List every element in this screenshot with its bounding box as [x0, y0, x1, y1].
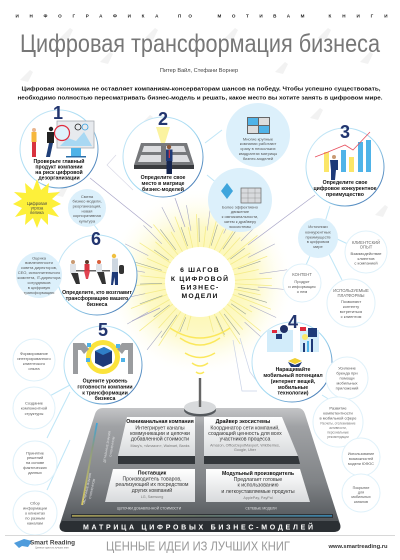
- bubble: collecting customer data: [13, 491, 57, 535]
- top label: МОТИВАМ: [218, 14, 305, 18]
- bubble: component structure: [13, 387, 55, 429]
- caption: [141, 175, 186, 193]
- icon: book: [14, 539, 32, 548]
- bubble: mobile channel coverage: Покрытие: [353, 486, 369, 490]
- signal arcs and pole: [170, 328, 230, 404]
- step 2: [123, 109, 203, 197]
- intro text: [18, 86, 383, 102]
- bubble: board engagement: комитета, IT-директора: [17, 275, 61, 280]
- starburst: digital threat: угроза: [31, 206, 44, 210]
- axis labels: СЕТЕВЫЕ МОДЕЛИ: [245, 506, 277, 510]
- caption: Наращивайте: [276, 366, 311, 373]
- number 1: 1: [53, 103, 63, 123]
- icon: team at table: [70, 254, 124, 285]
- card: modular producer: и легкоуставляемые продукты: [221, 489, 295, 495]
- caption: цифровое конкурентное: [313, 185, 377, 192]
- matrix title band: МАТРИЦА ЦИФРОВЫХ БИЗНЕС-МОДЕЛЕЙ: [83, 522, 313, 532]
- bubble: brand strengthening: бренда при: [336, 370, 358, 376]
- watermarks: [20, 28, 388, 217]
- card: ecosystem driver: Amazon, OfficeDepotMaxpert, Wildberries,: [210, 444, 280, 448]
- caption: к трансформации: [82, 390, 128, 396]
- bubble: movement to ecosystems: Более эффективно: [222, 204, 259, 210]
- bubble: board engagement: сотрудников: [28, 280, 50, 285]
- card: supplier: LG, Samsung: [141, 495, 163, 499]
- axis bar: [71, 514, 333, 518]
- connector lines: [46, 130, 350, 490]
- card: omnichannel company: Macy's, «Amazon», Walmart, Banks: [131, 444, 190, 448]
- bubble: brand strengthening: мобильных: [336, 380, 358, 386]
- footer rule: [5, 534, 395, 537]
- starburst: digital threat: Цифровая: [27, 201, 47, 206]
- card: supplier: Поставщик: [138, 470, 167, 476]
- platform body: [60, 408, 340, 532]
- card: modular producer: Модульный производитель: [222, 470, 294, 477]
- card: supplier: реализующий их посредством: [116, 481, 189, 488]
- bubble: platforms used: Позволяют: [341, 299, 361, 304]
- bubble: board engagement: [16, 252, 62, 298]
- bubble: brand strengthening: [326, 357, 368, 399]
- bubble: integrated customer experience: интегрированного: [17, 356, 51, 361]
- bubble: sources of advantage: в цифровом: [307, 239, 330, 244]
- bubble: mobile competence: Развитие: [329, 406, 347, 410]
- card: ecosystem driver: Координатор сети компаний,: [210, 424, 280, 432]
- step 3: [306, 122, 384, 206]
- caption: Определите свое: [323, 180, 368, 186]
- bubble: collecting customer data: Сбор: [30, 500, 41, 506]
- bubble: large companies: квадрантах матрицы: [239, 151, 277, 156]
- bubble: component structure: Создание: [25, 400, 44, 406]
- bubble: board engagement: трансформацию: [24, 290, 54, 295]
- number 6: 6: [91, 229, 101, 249]
- bubble: content: о нем: [297, 289, 308, 294]
- bubble: collecting customer data: по разным: [25, 516, 45, 520]
- bubble: platforms used: встретиться: [340, 309, 362, 314]
- bubble: fact-based decisions: решений: [27, 455, 43, 460]
- caption: (интернет вещей,: [271, 378, 316, 385]
- bubble: movement to ecosystems: экосистемы: [229, 224, 251, 229]
- bubble: movement to ecosystems: затем к драйверу: [224, 219, 256, 224]
- bubble: customer experience: Взаимодействие: [350, 251, 382, 256]
- number 2: 2: [158, 109, 168, 129]
- top label: [16, 14, 388, 18]
- bubble: collecting customer data: информации: [23, 506, 47, 510]
- bubble: platforms used: контенту: [343, 304, 359, 309]
- bubble: API use: Использование: [348, 452, 374, 456]
- bubble: large companies: сразу в нескольких: [240, 146, 276, 151]
- bubble: integrated customer experience: Формирование: [20, 351, 49, 356]
- saucer: [184, 400, 216, 416]
- platform: business model matrix: [60, 408, 340, 532]
- left edge scale and text: О КОНЕЧНОМ: [88, 478, 96, 499]
- center circle: 6 steps: БИЗНЕС-: [180, 284, 220, 292]
- caption: бизнеса: [87, 301, 107, 308]
- left edge scale and text: [82, 423, 116, 505]
- bubble: change of business model: новая: [82, 208, 92, 214]
- card: ecosystem driver: Google, Uber: [234, 448, 257, 452]
- bubble: change of business model: бизнес-модели,: [72, 198, 102, 204]
- bubble: board engagement: в цифровую: [28, 285, 50, 290]
- card: supplier: [105, 469, 195, 502]
- icon: monitor and people: [32, 121, 94, 158]
- axis labels: ЦЕПОЧКИ ДОБАВЛЕННОЙ СТОИМОСТИ: [117, 506, 182, 510]
- bubble: mobile channel coverage: для: [358, 490, 364, 494]
- caption: [313, 180, 377, 198]
- card: ecosystem driver: создающий ценность для всех: [208, 430, 282, 437]
- card: omnichannel company: Интегрирует каналы: [135, 426, 185, 432]
- card: supplier: Производитель товаров,: [122, 476, 182, 482]
- footer slogan: ЦЕННЫЕ ИДЕИ ИЗ ЛУЧШИХ КНИГ: [106, 540, 290, 554]
- card: omnichannel company: Омниканальная компания: [126, 419, 194, 425]
- caption: трансформацию вашего: [66, 295, 128, 302]
- icon: mobile and internet of things: [267, 325, 319, 367]
- caption: Оцените уровень: [83, 378, 127, 384]
- bubble: large companies: бизнес-моделей: [243, 156, 273, 161]
- caption: готовности компании: [77, 384, 133, 390]
- step 5: [64, 320, 142, 404]
- card: modular producer: [206, 469, 310, 502]
- bubble: change of business model: Смена: [81, 194, 94, 199]
- bubble: mobile competence: в мобильной сфере: [320, 416, 357, 420]
- bubble: component structure: компонентной: [21, 406, 47, 410]
- card: supplier: других компаний: [132, 487, 172, 494]
- step 1: [20, 103, 98, 188]
- icon: matrix plate and man: [134, 127, 194, 174]
- caption: Определите, кто возглавит: [62, 290, 132, 296]
- starburst: digital threat: [13, 179, 61, 228]
- card: omnichannel company: [118, 417, 195, 456]
- caption: бизнеса: [95, 395, 115, 402]
- bubble: platforms used: с клиентом: [341, 314, 362, 319]
- number 3: 3: [340, 122, 350, 142]
- caption: бизнес-моделей: [142, 186, 184, 193]
- caption: место в матрице: [142, 181, 185, 187]
- bubble: API use: [342, 438, 380, 476]
- bubble: board engagement: Оценка: [32, 256, 47, 260]
- top label: ПО: [178, 14, 192, 18]
- bubble: sources of advantage: мире: [313, 244, 323, 249]
- bubble: API use: модели ЮФОС: [348, 462, 374, 466]
- icon: bar chart with analyst: [315, 132, 371, 180]
- intro text: Цифровая экономика не оставляет компаниям-консерваторам шансов на победу. Чтобы успешно существовать,: [22, 86, 381, 92]
- bubble: customer experience: ОПЫТ: [360, 244, 373, 250]
- left edge scale and text: ЧАСТИЧНЫЕ ЗНАНИЯ: [82, 473, 92, 505]
- bubble: content: [283, 264, 321, 302]
- bubble: fact-based decisions: на основе: [26, 460, 45, 465]
- card: modular producer: ApplePay, PayPal: [243, 496, 273, 500]
- bubble: sources of advantage: Источники: [308, 224, 328, 229]
- bubble: mobile channel coverage: [342, 474, 380, 512]
- bubble: board engagement: вовлеченности: [25, 260, 53, 265]
- card: ecosystem driver: Драйвер экосистемы: [216, 418, 271, 425]
- caption: на риск цифровой: [35, 169, 83, 176]
- bubble: brand strengthening: приложений: [336, 386, 358, 390]
- bubble: customer experience: с компанией: [354, 260, 378, 266]
- bubble: customer experience: КЛИЕНТСКИЙ: [352, 240, 380, 245]
- caption: мобильные: [278, 384, 308, 391]
- caption: преимущество: [326, 192, 364, 198]
- bubble: mobile competence: рекомендации: [327, 435, 349, 439]
- bubble: brand strengthening: Усиление: [338, 366, 357, 370]
- left edge scale and text: О КОНЕЧНОМ: [108, 436, 116, 457]
- caption: [263, 366, 323, 396]
- bubble: mobile competence: [313, 397, 363, 447]
- bubble: large companies: Многие крупные: [243, 136, 274, 142]
- caption: мобильный потенциал: [263, 372, 323, 379]
- axis labels: [117, 506, 277, 510]
- bubble: content: КОНТЕНТ: [292, 272, 312, 277]
- footer logo: [14, 539, 75, 550]
- bubble: sources of advantage: [298, 218, 338, 258]
- bubble: collecting customer data: о клиентах: [25, 510, 45, 516]
- caption: [34, 158, 84, 182]
- starburst: digital threat: велика: [30, 210, 44, 215]
- center circle: 6 steps: [165, 247, 235, 317]
- caption: Проверьте главный: [34, 158, 84, 165]
- center circle: 6 steps: МОДЕЛИ: [181, 293, 219, 300]
- card backing: [118, 456, 300, 464]
- bubble: platforms used: [327, 279, 375, 327]
- bubble: mobile competence: персональные: [327, 430, 349, 434]
- bubble: movement to ecosystems: к омниканальности,: [222, 214, 258, 219]
- number 4: 4: [288, 312, 298, 332]
- bubble: fact-based decisions: данных: [28, 470, 42, 475]
- bubble: component structure: структуры: [25, 411, 43, 416]
- bubble: board engagement: совета директоров,: [21, 265, 57, 270]
- bubble: platforms used: ИСПОЛЬЗУЕМЫЕ: [333, 288, 369, 293]
- bubble: mobile channel coverage: мобильных: [351, 495, 371, 499]
- bubble: board engagement: CEO, исполнительного: [18, 270, 61, 275]
- card: omnichannel company: коммуникации и цепочки: [130, 431, 190, 437]
- card: ecosystem driver: участников процесса: [220, 436, 270, 442]
- intro text: необходимо полностью пересматривать бизнес-модель и решать, какое место вы хотите занять в цифровом мире.: [18, 94, 383, 102]
- bubble: fact-based decisions: [13, 441, 57, 485]
- bubble: large companies: компании работают: [240, 141, 276, 146]
- bubble: platforms used: ПЛАТФОРМЫ: [337, 293, 365, 298]
- matrix title band: [60, 521, 340, 532]
- footer url: www.smartreading.ru: [327, 544, 388, 550]
- bubble: content: и информация: [288, 284, 316, 289]
- card: omnichannel company: добавленной стоимости: [131, 436, 189, 442]
- bubble: brand strengthening: помощи: [340, 376, 354, 380]
- bubble: customer experience: [345, 231, 387, 273]
- card: ecosystem driver: [204, 417, 298, 456]
- card: modular producer: Предлагает готовые: [234, 477, 282, 483]
- bubble: movement to ecosystems: [208, 168, 272, 232]
- caption: Определите свое: [141, 175, 186, 181]
- footer logo: Smart Reading: [30, 540, 75, 546]
- card: modular producer: к использованию: [238, 482, 279, 488]
- bubble: change of business model: реорганизация,: [73, 204, 101, 208]
- number 5: 5: [98, 320, 108, 340]
- footer logo: Ценные идеи из лучших книг: [35, 546, 69, 550]
- bubble: collecting customer data: каналам: [27, 520, 43, 526]
- bubble: mobile competence: компетентности: [323, 410, 353, 416]
- bubble: change of business model: корпоративная: [73, 213, 101, 218]
- center circle: 6 steps: 6 ШАГОВ: [180, 267, 220, 274]
- step 6: [57, 229, 137, 315]
- bubble: change of business model: культура: [79, 218, 96, 224]
- bubble: sources of advantage: конкурентных: [305, 230, 331, 234]
- bubble: change of business model: [68, 189, 106, 227]
- bubble: integrated customer experience: клиентского: [23, 361, 46, 366]
- bubble: sources of advantage: преимуществ: [305, 234, 331, 240]
- icon: cube and robot arms: [73, 340, 133, 374]
- bubble: customer experience: клиентов: [358, 256, 374, 261]
- top label: ИНФОГРАФИКА: [16, 14, 159, 18]
- top label: КНИГИ: [328, 14, 388, 18]
- icon: diamond and table: [221, 183, 261, 203]
- bubble: movement to ecosystems: движение: [231, 209, 250, 214]
- bubble: API use: возможностей: [349, 457, 373, 461]
- authors: Питер Вайл, Стефани Ворнер: [160, 67, 238, 74]
- caption: дезорганизации: [38, 176, 80, 182]
- bubble: content: Продукт: [294, 279, 310, 284]
- icon: matrix quadrants: [247, 117, 270, 134]
- bubble: integrated customer experience: [13, 339, 55, 381]
- caption: продукт компании: [35, 164, 83, 170]
- caption: [77, 378, 133, 402]
- bubble: integrated customer experience: опыта: [28, 366, 40, 371]
- bubble: mobile competence: активности,: [329, 426, 347, 430]
- bubble: large companies: [226, 103, 290, 167]
- sunburst: [108, 190, 292, 374]
- bubble: fact-based decisions: Принятие: [26, 450, 45, 456]
- bubble: fact-based decisions: фактических: [23, 465, 47, 470]
- bubble: mobile competence: Расчеты, отслеживание: [320, 422, 356, 426]
- step 4: [252, 312, 332, 402]
- left edge scale and text: ДЕТАЛЬНЫЕ ЗНАНИЯ: [102, 431, 112, 463]
- caption: технологии): [277, 390, 309, 396]
- caption: [62, 290, 132, 308]
- bubble: mobile channel coverage: каналов: [354, 500, 368, 504]
- center circle: 6 steps: К ЦИФРОВОЙ: [171, 274, 229, 283]
